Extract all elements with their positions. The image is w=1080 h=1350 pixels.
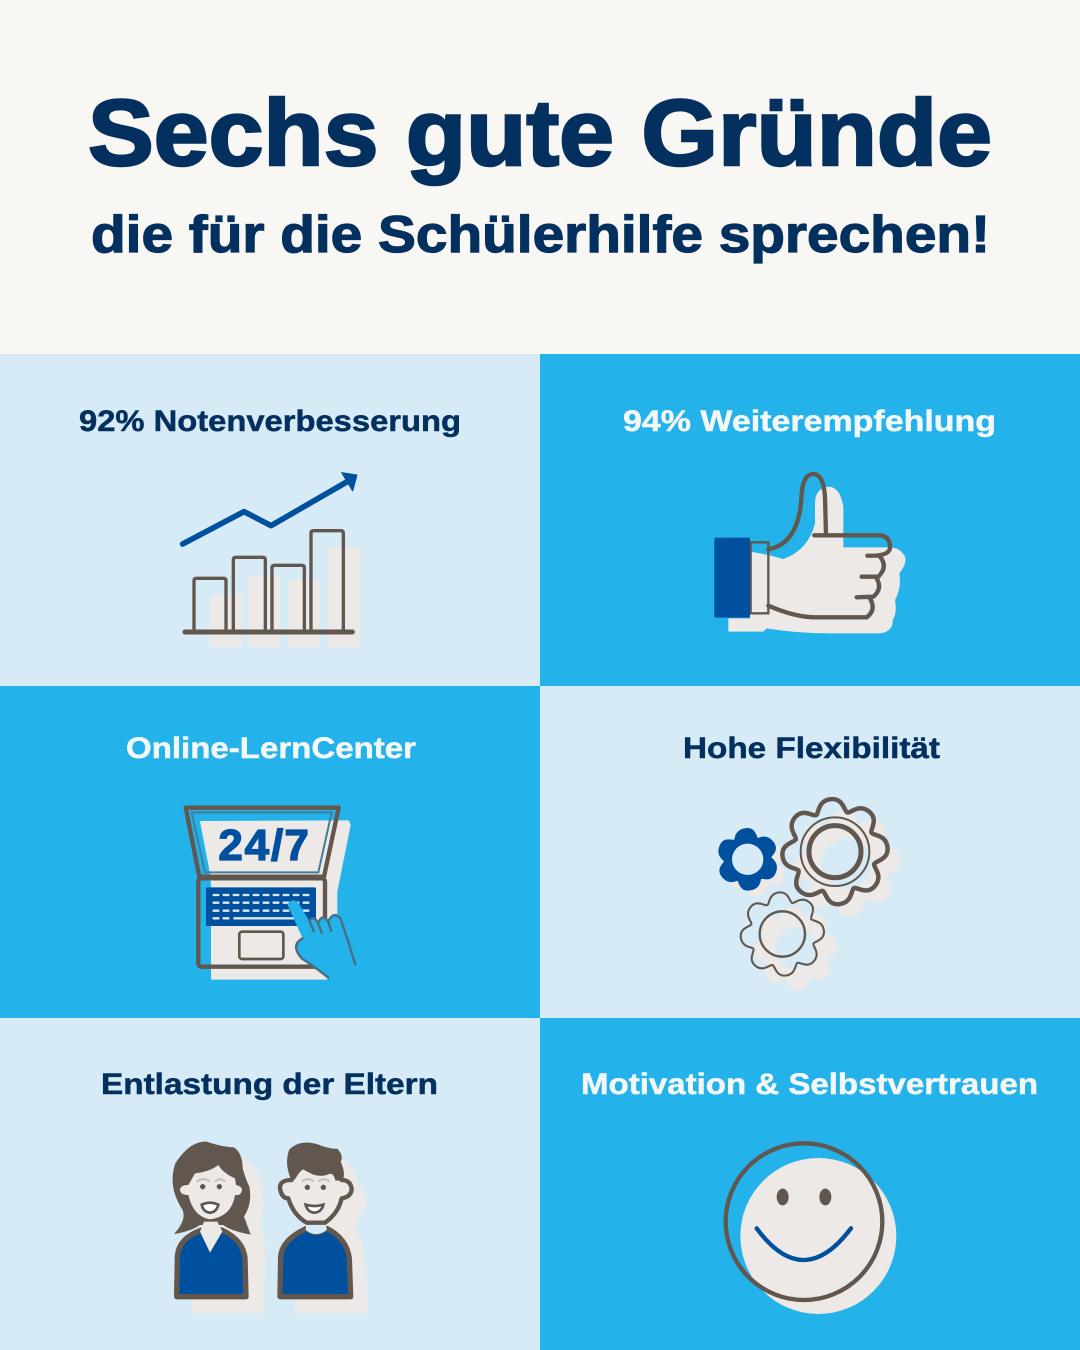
icon: smiley xyxy=(726,1143,896,1314)
heading: Online-LernCenter: Online-LernCenter xyxy=(126,732,416,765)
icon: bar chart with rising arrow xyxy=(183,473,360,647)
heading: Entlastung der Eltern: Entlastung der Eltern xyxy=(101,1068,438,1101)
heading: 92% Notenverbesserung: 92% Notenverbesserung xyxy=(79,405,461,438)
panel: Hohe Flexibilität xyxy=(540,686,1080,1018)
header panel xyxy=(0,0,1080,354)
icon: laptop 24/7 xyxy=(186,808,355,979)
title: Sechs gute Gründe xyxy=(88,80,992,185)
panel: Online-LernCenter xyxy=(0,686,540,1018)
man xyxy=(280,1143,352,1297)
panel: Entlastung der Eltern xyxy=(0,1018,540,1350)
icon: gears xyxy=(709,795,904,994)
text: 24/7: 24/7 xyxy=(218,821,309,870)
panel: Notenverbesserung xyxy=(0,354,540,686)
heading: Motivation & Selbstvertrauen: Motivation & Selbstvertrauen xyxy=(581,1068,1038,1101)
icon: parents xyxy=(173,1142,367,1313)
panel: Motivation & Selbstvertrauen xyxy=(540,1018,1080,1350)
icon: thumbs up xyxy=(714,474,906,633)
woman xyxy=(173,1142,251,1297)
heading: Hohe Flexibilität: Hohe Flexibilität xyxy=(683,732,940,765)
panel: Weiterempfehlung xyxy=(540,354,1080,686)
heading: 94% Weiterempfehlung: 94% Weiterempfehlung xyxy=(623,405,996,438)
subtitle: die für die Schülerhilfe sprechen! xyxy=(91,206,990,264)
